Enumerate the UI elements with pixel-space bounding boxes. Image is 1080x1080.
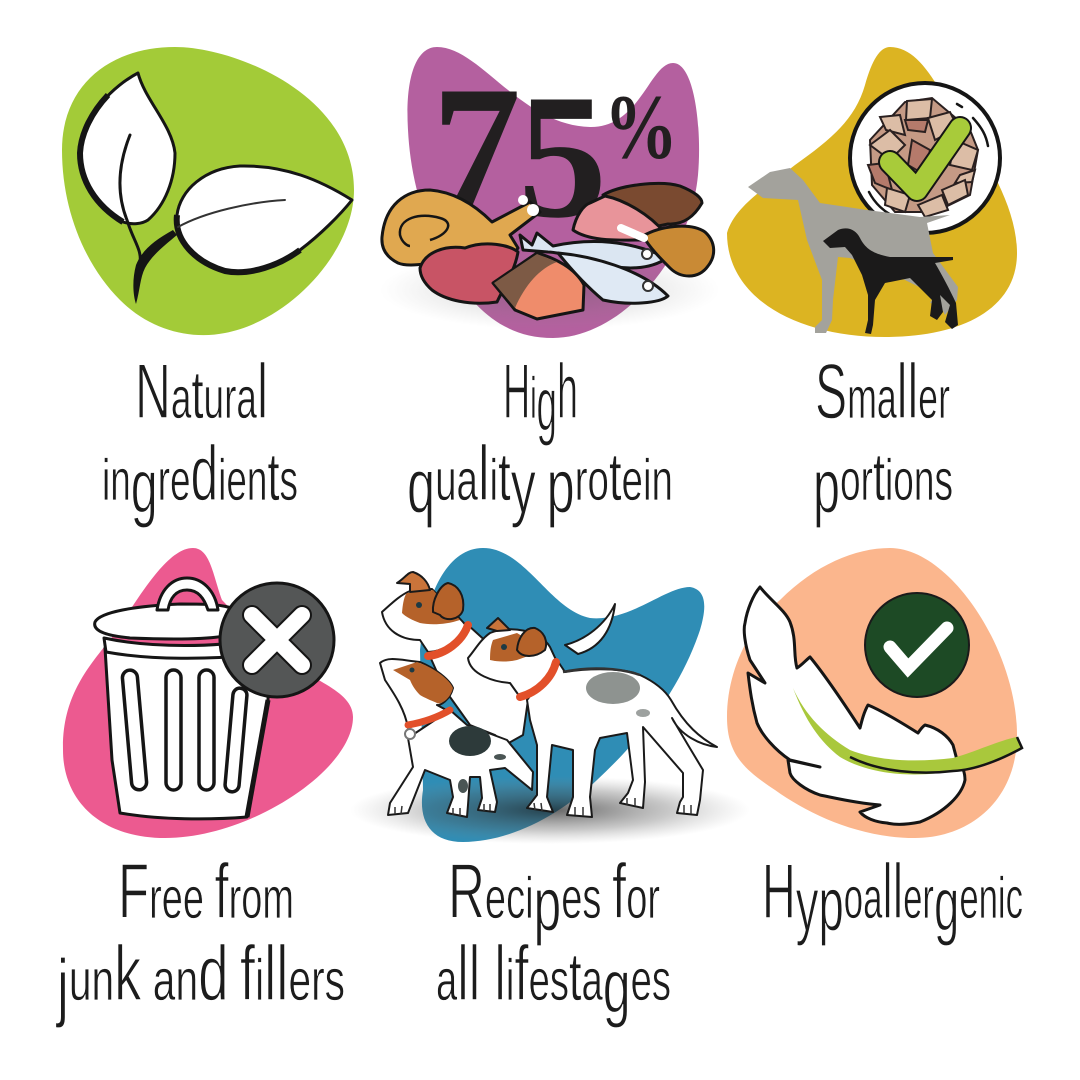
label: p [547, 444, 575, 529]
75 percent figure: 5 [518, 57, 607, 255]
label: or [840, 448, 873, 513]
icon: plate with food and check [850, 83, 1000, 233]
label [436, 847, 671, 1029]
dog: upper tail [565, 604, 615, 654]
dog: right [468, 618, 717, 817]
label: p [813, 444, 840, 529]
panel: recipes for all lifestages [350, 548, 750, 1029]
label: es [631, 948, 671, 1013]
label: for [612, 847, 678, 935]
label: tions [873, 439, 991, 515]
label [813, 347, 953, 529]
chicken [382, 190, 540, 265]
label: q [407, 444, 435, 529]
label: oa [844, 866, 883, 931]
icon: trash can [95, 578, 270, 819]
label: y [511, 444, 536, 529]
dog: top [382, 572, 528, 745]
icon: feather [744, 587, 1022, 824]
label: ro [575, 448, 609, 513]
icon: meat and fish [380, 183, 720, 330]
label [102, 347, 298, 529]
label: p [534, 862, 561, 947]
label: Natural [135, 347, 268, 435]
label: es [561, 866, 612, 931]
icon: large grey dog [748, 168, 958, 333]
icon: cross badge [220, 583, 334, 697]
label [56, 847, 345, 1029]
ground shadow [350, 776, 750, 844]
label: tein [609, 439, 699, 515]
label: H [762, 847, 796, 935]
drumstick [643, 226, 714, 276]
dog: lower left [380, 659, 533, 817]
peach blob [727, 548, 1017, 838]
label: lit [478, 429, 517, 517]
panel: hypoallergenic [727, 548, 1023, 947]
icon: leaves [80, 73, 352, 304]
label: Hi [503, 347, 559, 435]
label [407, 347, 673, 529]
red meat [420, 244, 518, 303]
label: k and fillers [114, 929, 369, 1017]
label: g [934, 862, 959, 947]
label: ller [882, 847, 955, 935]
label: h [557, 347, 578, 435]
label: g [131, 444, 158, 529]
75 percent figure: 7 [432, 49, 521, 247]
green blob [62, 47, 354, 335]
label: all lifesta [436, 929, 614, 1017]
fish upper [520, 233, 667, 268]
salmon [493, 253, 584, 319]
75 percent figure [432, 49, 678, 255]
purple blob [407, 47, 699, 338]
fish lower [558, 253, 668, 303]
right meat [603, 183, 702, 232]
pink blob [63, 548, 353, 838]
label: Free from [118, 847, 294, 935]
panel: free from junk and fillers [56, 548, 353, 1029]
panel: high quality protein [380, 47, 720, 529]
label: j [56, 944, 69, 1029]
label: in [102, 448, 147, 513]
icon: small black dog [823, 228, 958, 334]
label: re [158, 448, 191, 513]
panel: smaller portions [727, 47, 1017, 529]
75 percent figure: % [604, 76, 678, 178]
label: g [537, 362, 557, 447]
label: ua [435, 448, 478, 513]
label: g [603, 944, 631, 1029]
label: dients [191, 429, 309, 517]
label: Smaller [815, 347, 950, 435]
yellow blob [727, 47, 1017, 337]
label: yp [796, 862, 844, 947]
blue blob [420, 548, 704, 842]
label: un [69, 948, 114, 1013]
icon: three dogs [380, 572, 717, 817]
panel: natural ingredients [62, 47, 354, 529]
icon: check badge [865, 593, 969, 697]
label: Reci [448, 847, 559, 935]
label: enic [959, 866, 1023, 931]
